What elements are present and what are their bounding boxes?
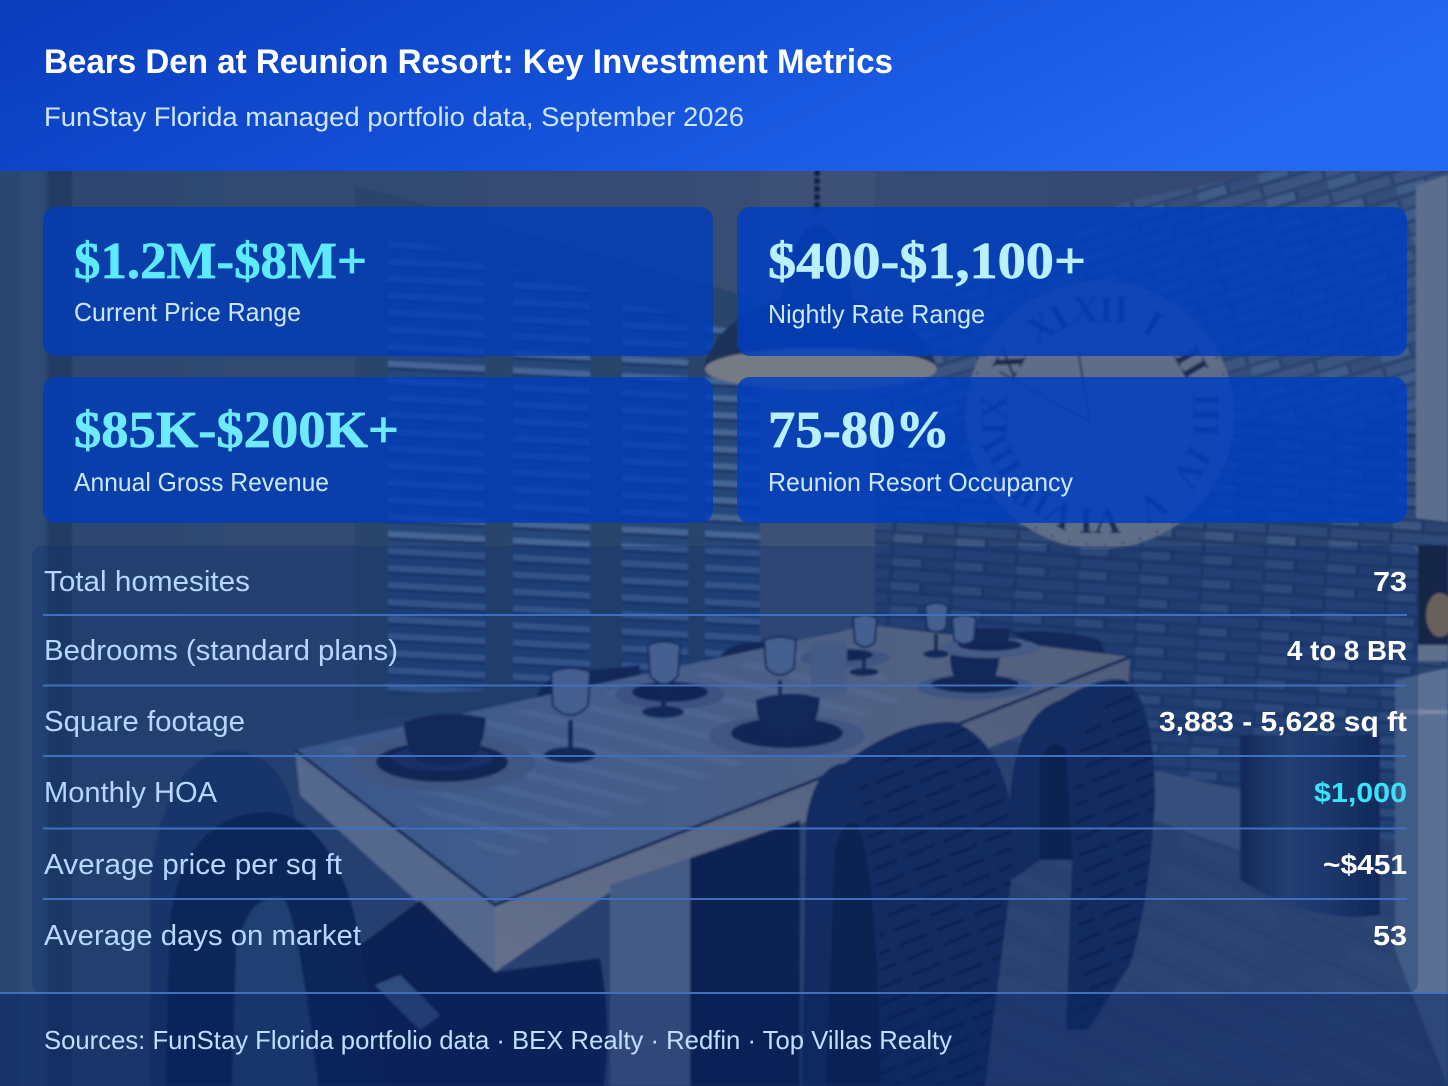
stat card: current price range: Current Price Range [74, 297, 301, 327]
row: square footage: 3,883 - 5,628 sq ft [1159, 706, 1407, 737]
stat card: annual gross revenue: $85K-$200K+ [74, 402, 399, 459]
wall clock: XI [1019, 295, 1076, 353]
wall clock: XII [1071, 289, 1129, 331]
stat card: occupancy: 75-80% [768, 402, 950, 459]
subtitle: FunStay Florida managed portfolio data, September 2026 [44, 102, 744, 132]
wall clock: III [1184, 393, 1226, 437]
wall clock: II [1165, 339, 1217, 386]
wall clock: V [1130, 481, 1175, 531]
stat card: occupancy [737, 377, 1407, 523]
header band [0, 0, 1448, 171]
stat card: annual gross revenue [43, 377, 713, 523]
stat card: current price range: $1.2M-$8M+ [74, 233, 367, 290]
wall clock: VII [1012, 473, 1083, 538]
upper cabinet [1416, 175, 1448, 522]
wall clock: VIII [973, 426, 1045, 509]
wall clock: VI [1079, 499, 1121, 541]
row: monthly HOA [44, 777, 1407, 809]
row: total homesites [44, 566, 1407, 598]
row: average price per sq ft: Average price per sq ft [44, 849, 342, 881]
footer band with sources [0, 992, 1448, 1086]
row: average days on market: 53 [1373, 920, 1407, 951]
lower cabinet [1395, 668, 1448, 1086]
lighter wall column [760, 170, 875, 660]
stat card: occupancy: Reunion Resort Occupancy [768, 467, 1073, 497]
row: square footage [44, 706, 1407, 738]
pendant lamp [703, 170, 938, 390]
window with plantation shutters [355, 185, 760, 720]
title: Bears Den at Reunion Resort: Key Investment Metrics [44, 43, 893, 81]
row: bedrooms: 4 to 8 BR [1287, 635, 1407, 666]
brick wall [875, 170, 1448, 850]
row: monthly HOA: $1,000 [1314, 777, 1407, 808]
wall clock: I [1136, 302, 1169, 346]
wall clock: X [984, 340, 1034, 385]
dining table [295, 625, 1130, 1086]
data table panel [32, 546, 1418, 993]
dining chairs [150, 679, 1155, 1086]
wall clock: IV [1162, 439, 1220, 497]
wall clock: IX [974, 394, 1016, 436]
baseboard [1153, 770, 1240, 850]
stat card: nightly rate range [737, 207, 1407, 356]
stat card: current price range [43, 207, 713, 356]
row: square footage: Square footage [44, 706, 245, 738]
row: average price per sq ft [44, 849, 1407, 881]
row: total homesites: 73 [1373, 566, 1407, 597]
floor [600, 790, 1448, 1086]
row: average days on market [44, 920, 1407, 952]
place settings [350, 628, 1040, 792]
row: monthly HOA: Monthly HOA [44, 777, 218, 809]
stat card: annual gross revenue: Annual Gross Revenue [74, 467, 329, 497]
wine glasses [551, 603, 976, 715]
pitcher [811, 642, 847, 694]
row: average days on market: Average days on market [44, 920, 361, 952]
stat card: nightly rate range: Nightly Rate Range [768, 299, 985, 329]
left curtain and door frame [0, 170, 72, 1086]
row: total homesites: Total homesites [44, 566, 250, 598]
wall clock [966, 281, 1234, 549]
stat card: nightly rate range: $400-$1,100+ [768, 233, 1086, 290]
row: average price per sq ft: ~$451 [1323, 849, 1407, 880]
footer band with sources: Sources: FunStay Florida portfolio data · BEX Realty · Redfin · Top Villas Realty [44, 1025, 952, 1055]
row: bedrooms: Bedrooms (standard plans) [44, 635, 398, 667]
coffee maker [1418, 545, 1448, 661]
back chairs [536, 630, 1106, 705]
trash can [1240, 735, 1380, 917]
row: bedrooms [44, 635, 1407, 667]
